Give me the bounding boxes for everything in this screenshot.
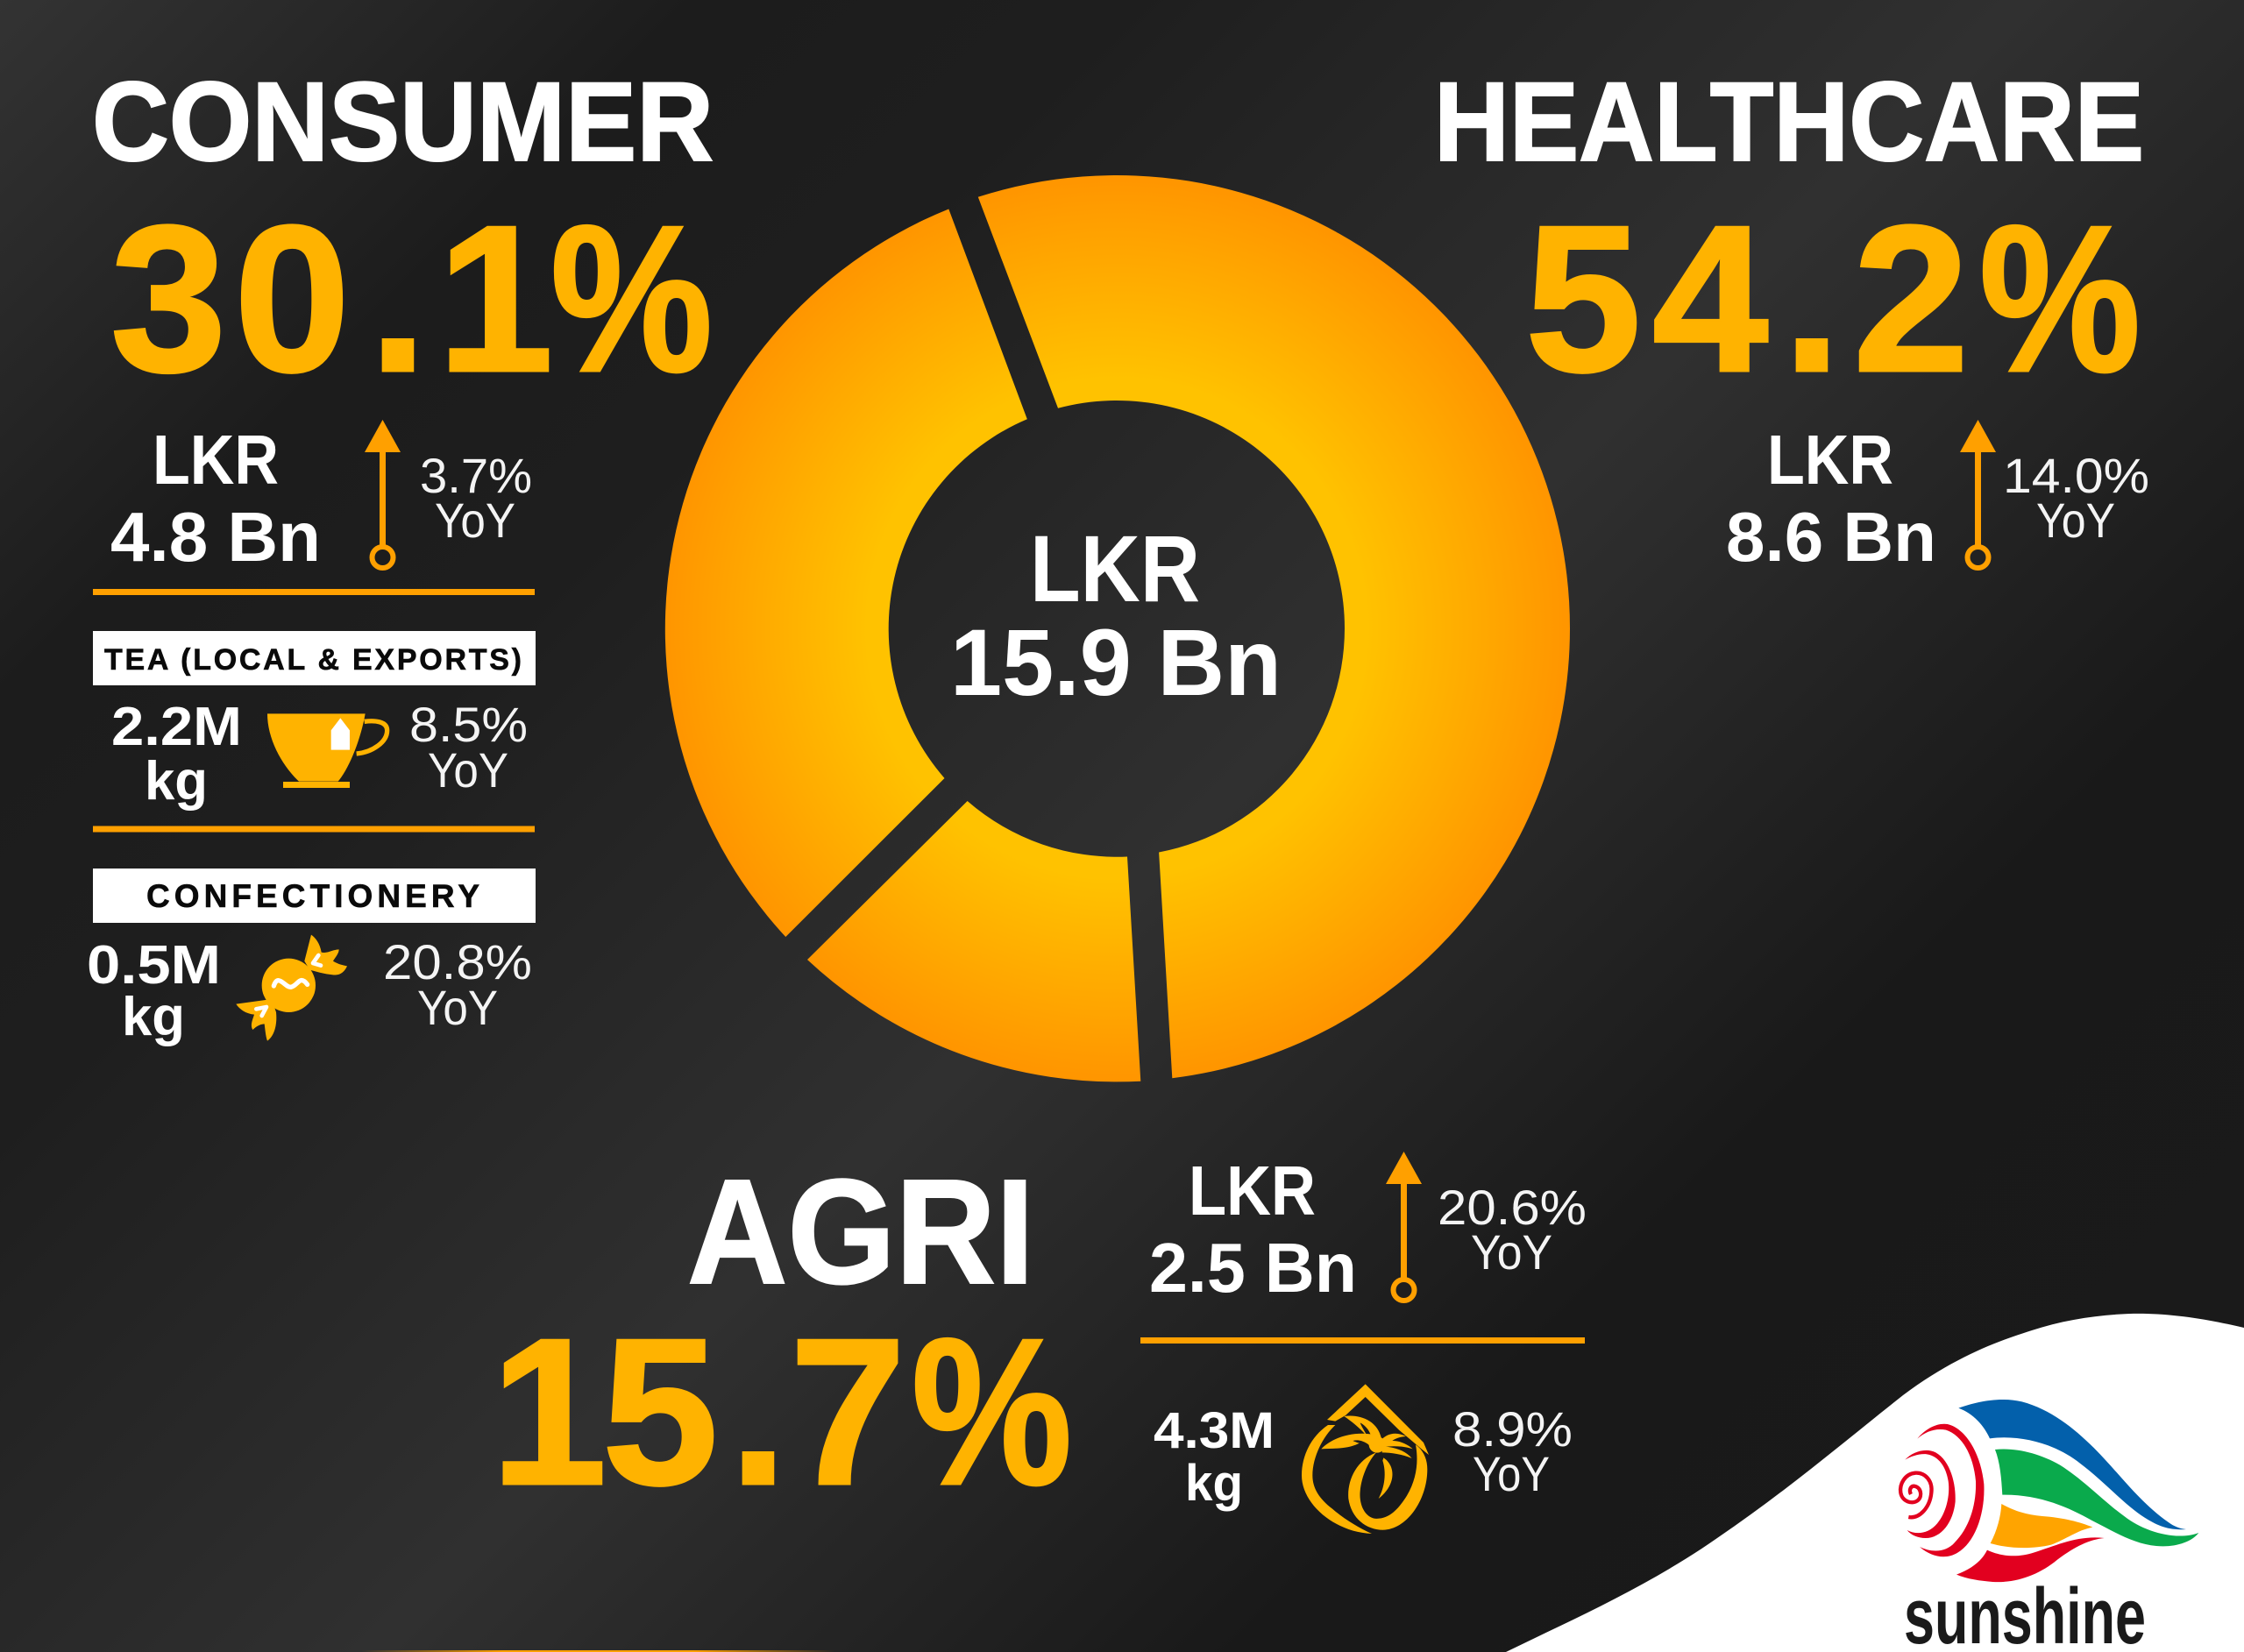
agri volume <box>1154 1402 1275 1512</box>
segment: healthcare <box>978 175 1570 1078</box>
icon: candy <box>236 935 347 1041</box>
agri volume yoy: 8.9% <box>1452 1401 1573 1457</box>
arrow: agri growth <box>1386 1152 1422 1301</box>
agri volume yoy <box>1452 1401 1573 1501</box>
agri share: 15.7 <box>491 1296 905 1528</box>
heading: agri: AGRI <box>687 1149 1034 1315</box>
consumer revenue: LKR <box>153 421 279 499</box>
arrow: consumer growth <box>365 420 401 568</box>
confectionery label: CONFECTIONERY <box>146 878 479 914</box>
tea yoy <box>409 697 528 798</box>
agri yoy <box>1438 1180 1587 1280</box>
icon: coconut palm drop <box>1302 1384 1429 1534</box>
consumer revenue <box>110 421 321 576</box>
consumer yoy <box>420 448 532 548</box>
healthcare revenue: LKR <box>1767 421 1893 499</box>
consumer yoy: 3.7% <box>420 448 532 503</box>
donut centre total <box>950 515 1282 715</box>
icon: tea cup <box>267 713 387 788</box>
confectionery volume: 0.5M <box>87 935 221 996</box>
agri volume: 4.3M <box>1154 1402 1275 1459</box>
tea volume: kg <box>145 751 208 812</box>
healthcare revenue: 8.6 Bn <box>1726 498 1936 576</box>
agri volume yoy: YoY <box>1473 1446 1550 1501</box>
panel: agri <box>491 1149 1587 1534</box>
agri volume: kg <box>1185 1455 1243 1512</box>
tea label: TEA (LOCAL & EXPORTS) <box>104 643 522 677</box>
tea yoy: 8.5% <box>409 697 528 752</box>
consumer share: 30.1 <box>110 183 553 415</box>
agri revenue <box>1149 1152 1357 1307</box>
donut centre total: LKR <box>1030 515 1200 621</box>
arrow: healthcare growth <box>1960 420 1996 568</box>
donut centre total: 15.9 Bn <box>950 609 1282 715</box>
agri revenue: 2.5 Bn <box>1149 1229 1357 1307</box>
segment: agri <box>807 801 1140 1081</box>
confectionery yoy: YoY <box>417 980 498 1035</box>
confectionery yoy <box>383 934 532 1035</box>
tea volume: 2.2M <box>111 697 242 757</box>
donut chart <box>665 175 1570 1081</box>
agri yoy: 20.6% <box>1438 1180 1587 1235</box>
consumer revenue: 4.8 Bn <box>110 498 321 576</box>
confectionery label <box>93 869 536 923</box>
healthcare share: % <box>1979 183 2141 415</box>
tea yoy: YoY <box>428 742 508 798</box>
consumer yoy: YoY <box>435 493 515 548</box>
logo mark <box>1900 1400 2198 1582</box>
agri revenue: LKR <box>1189 1152 1316 1230</box>
healthcare share: 54.2 <box>1525 183 1969 415</box>
segment: consumer <box>665 209 1027 937</box>
confectionery yoy: 20.8% <box>383 934 532 989</box>
agri share: % <box>912 1296 1072 1528</box>
heading: consumer: CONSUMER <box>92 60 714 185</box>
agri yoy: YoY <box>1471 1224 1552 1280</box>
healthcare revenue <box>1726 421 1936 576</box>
panel: consumer <box>87 60 714 1047</box>
healthcare yoy <box>2003 448 2149 548</box>
healthcare yoy: YoY <box>2036 493 2115 548</box>
white corner wave <box>1506 1314 2244 1652</box>
tea volume <box>111 697 242 812</box>
tea label <box>93 631 536 685</box>
confectionery volume <box>87 935 221 1047</box>
confectionery volume: kg <box>122 987 185 1047</box>
heading: healthcare: HEALTHCARE <box>1434 60 2144 185</box>
healthcare yoy: 14.0% <box>2003 448 2149 503</box>
logo: sunshine <box>1900 1400 2198 1652</box>
panel: healthcare <box>1434 60 2149 576</box>
consumer share: % <box>550 183 713 415</box>
